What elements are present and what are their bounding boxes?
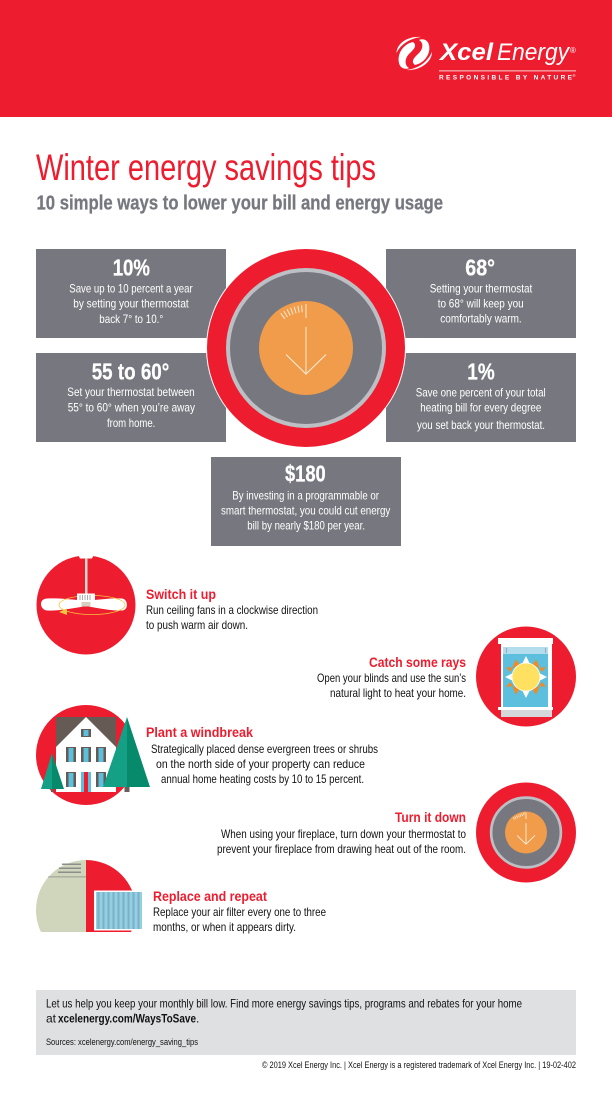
tip: turn it down <box>217 810 466 856</box>
Xcel Energy logo: Energy <box>497 39 571 66</box>
tip: replace and repeat <box>153 889 326 934</box>
tip: catch some rays: Catch some rays <box>369 655 466 670</box>
tip: switch it up <box>146 587 318 632</box>
footer call to action: xcelenergy.com/WaysToSave <box>58 1012 196 1026</box>
tip: switch it up: to push warm air down. <box>146 618 248 632</box>
panel: $180: bill by nearly $180 per year. <box>247 518 365 532</box>
tip: catch some rays <box>317 655 466 700</box>
panel: 68 degrees: Setting your thermostat <box>430 282 533 296</box>
panel: 1% <box>386 353 576 442</box>
tip: replace and repeat: Replace and repeat <box>153 889 267 904</box>
Xcel Energy logo <box>396 37 576 81</box>
panel: $180: smart thermostat, you could cut energy <box>221 503 390 517</box>
icon: ceiling fan <box>36 554 136 654</box>
tip: plant a windbreak: Strategically placed dense evergreen trees or shrubs <box>151 742 378 756</box>
panel: 10% <box>36 249 226 338</box>
panel: $180: $180 <box>285 461 326 487</box>
tip: plant a windbreak: on the north side of your property can reduce <box>156 757 365 771</box>
tip: catch some rays: Open your blinds and use the sun’s <box>317 671 466 685</box>
panel: 1%: you set back your thermostat. <box>417 418 545 432</box>
icon: large thermostat <box>206 248 406 448</box>
panel: 55 to 60 <box>36 353 226 442</box>
panel: 1%: Save one percent of your total <box>416 386 546 400</box>
icon: small thermostat <box>476 782 576 882</box>
icon: house with trees <box>36 705 150 805</box>
tip: turn it down: Turn it down <box>395 810 466 825</box>
header band <box>0 0 612 117</box>
subtitle: 10 simple ways to lower your bill and energy usage <box>36 192 443 214</box>
footer call to action <box>36 990 576 1055</box>
footer call to action: at <box>46 1012 57 1026</box>
Xcel Energy logo: ® <box>572 73 576 78</box>
tip: plant a windbreak: Plant a windbreak <box>146 725 253 740</box>
panel: 55 to 60: Set your thermostat between <box>67 385 195 399</box>
panel: 10%: back 7° to 10.° <box>99 312 163 326</box>
tip: plant a windbreak <box>146 725 378 786</box>
panel: 68 degrees: comfortably warm. <box>440 312 522 326</box>
tip: replace and repeat: Replace your air filter every one to three <box>153 905 326 919</box>
tip: replace and repeat: months, or when it appears dirty. <box>153 920 296 934</box>
panel: $180 <box>211 457 401 546</box>
panel: 1%: heating bill for every degree <box>420 401 542 415</box>
tip: switch it up: Switch it up <box>146 587 216 602</box>
panel: $180: By investing in a programmable or <box>232 488 379 502</box>
Xcel Energy logo: Xcel <box>438 39 494 66</box>
icon: sunny window <box>476 626 576 726</box>
tip: turn it down: prevent your fireplace from drawing heat out of the room. <box>217 842 466 856</box>
panel: 55 to 60: 55 to 60° <box>92 358 169 384</box>
panel: 10%: Save up to 10 percent a year <box>69 282 193 296</box>
tip: catch some rays: natural light to heat your home. <box>330 686 466 700</box>
Xcel Energy logo: ® <box>570 46 576 55</box>
title: Winter energy savings tips <box>36 147 376 188</box>
panel: 68 degrees: to 68° will keep you <box>438 297 524 311</box>
Xcel Energy logo: RESPONSIBLE BY NATURE <box>439 74 573 81</box>
panel: 10%: 10% <box>113 255 150 281</box>
tip: turn it down: When using your fireplace, turn down your thermostat to <box>221 827 466 841</box>
panel: 55 to 60: from home. <box>107 416 155 430</box>
panel: 68 degrees: 68° <box>465 255 495 281</box>
icon: air filter <box>36 860 142 932</box>
tip: switch it up: Run ceiling fans in a clockwise direction <box>146 603 318 617</box>
panel: 68 degrees <box>386 249 576 338</box>
footer call to action: . <box>196 1012 199 1026</box>
panel: 1%: 1% <box>467 358 495 384</box>
tip: plant a windbreak: annual home heating costs by 10 to 15 percent. <box>161 772 364 786</box>
panel: 55 to 60: 55° to 60° when you’re away <box>68 401 195 415</box>
footer call to action: Sources: xcelenergy.com/energy_saving_tips <box>46 1037 198 1047</box>
panel: 10%: by setting your thermostat <box>73 297 189 311</box>
